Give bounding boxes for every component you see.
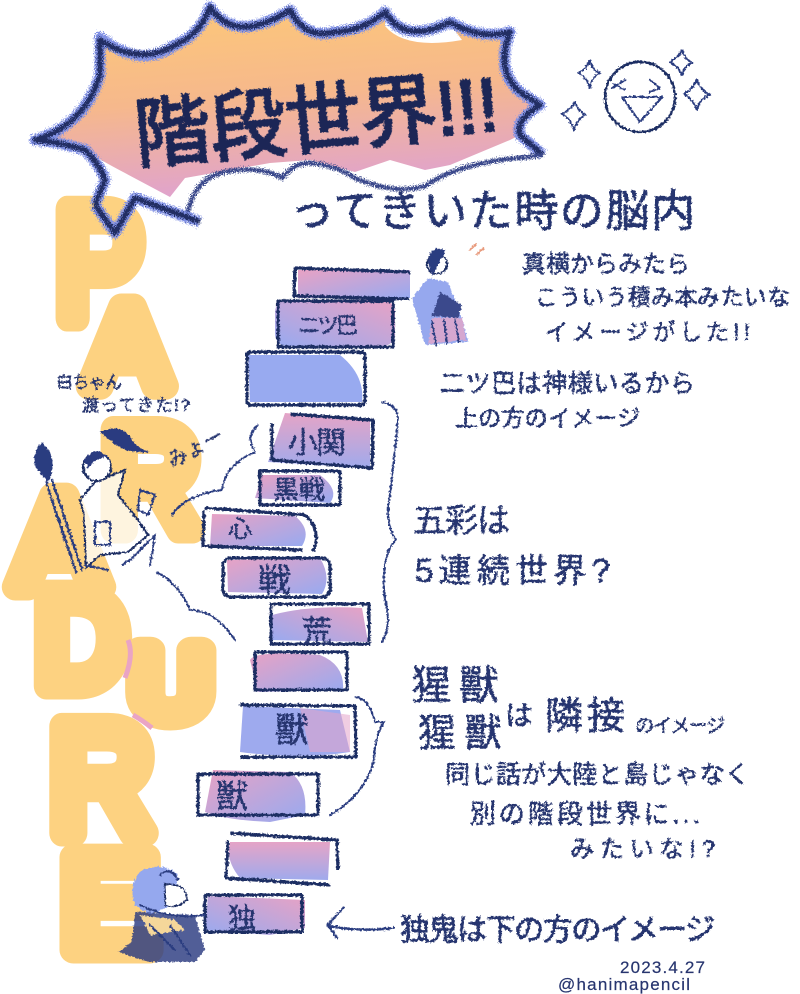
book 4: 小関 bbox=[268, 413, 373, 468]
book 1 bbox=[294, 268, 410, 299]
credit: @hanimapencil bbox=[558, 975, 690, 994]
note: 五彩: 5連続世界? bbox=[415, 552, 610, 589]
book 3 bbox=[247, 352, 365, 405]
background letters: PARADURE bbox=[15, 175, 210, 979]
book 8: 荒: 荒 bbox=[302, 616, 332, 649]
note: ニツ巴: 二ツ巴は神様いるから bbox=[440, 370, 695, 398]
note: side view: 真横からみたら bbox=[522, 251, 690, 278]
book 10: 獸 bbox=[240, 705, 356, 757]
figure: sitting character bottom bbox=[118, 867, 205, 962]
curly line: lower bbox=[157, 572, 235, 640]
book 7: 戦 bbox=[223, 558, 330, 599]
note: 五彩 bbox=[413, 502, 610, 589]
book 5: 戦 bbox=[255, 471, 340, 505]
brace: adjacent worlds bbox=[330, 697, 384, 815]
note: adjacent worlds: は bbox=[505, 700, 533, 731]
note: adjacent worlds: 同じ話が大陸と島じゃなく bbox=[445, 761, 750, 789]
book 2: ニツ巴: ニツ巴 bbox=[298, 313, 358, 338]
book 4: 小関: 小関 bbox=[288, 427, 346, 460]
book 7: 戦: 戦 bbox=[258, 562, 291, 599]
background letters: PARADURE: A bbox=[15, 468, 103, 615]
note: adjacent worlds: 猩獸 bbox=[411, 664, 499, 708]
book stack bbox=[198, 268, 410, 935]
sound effect text: みょー bbox=[164, 425, 227, 472]
background letters: PARADURE: D bbox=[36, 565, 126, 715]
note: adjacent worlds: 猩獸 bbox=[418, 713, 502, 755]
note: ニツ巴: 上の方のイメージ bbox=[455, 405, 640, 431]
icon: sparkles bbox=[562, 50, 710, 130]
background letters: PARADURE: U bbox=[132, 629, 210, 737]
note: ニツ巴 bbox=[440, 370, 695, 431]
background letters: PARADURE: E bbox=[62, 828, 156, 979]
curly line: upper bbox=[172, 425, 258, 515]
book 11: 獣 bbox=[198, 770, 318, 822]
note: side view: こういう積み本みたいな bbox=[535, 284, 790, 310]
book 6: 心: 心 bbox=[228, 516, 252, 543]
speech: 白ちゃん渡ってきた: 渡ってきた!? bbox=[82, 396, 190, 415]
subtitle: ってきいた時の脳内 bbox=[290, 187, 695, 236]
book 12 bbox=[226, 833, 338, 885]
icon: laughing face bbox=[605, 62, 675, 132]
book 8: 荒 bbox=[271, 604, 369, 649]
brace: five-colour group bbox=[382, 402, 398, 642]
background letters: PARADURE: A bbox=[89, 283, 166, 411]
note: side view bbox=[522, 251, 790, 345]
note: adjacent worlds bbox=[411, 664, 750, 863]
note: adjacent worlds: みたいな!? bbox=[570, 836, 715, 863]
figure: girl with paintbrush bbox=[34, 428, 155, 572]
book 9 bbox=[250, 652, 347, 692]
book 10: 獸: 獸 bbox=[275, 712, 309, 750]
note: 独鬼: 独鬼は下の方のイメージ bbox=[400, 914, 715, 947]
letter overlap accents bbox=[125, 640, 152, 728]
speech: 白ちゃん渡ってきた bbox=[56, 373, 190, 415]
arrow to 独 book bbox=[328, 908, 394, 938]
book 5: 戦: 黒戦 bbox=[273, 475, 325, 505]
note: side view: イメージがした!! bbox=[545, 319, 750, 345]
book 6: 心 bbox=[203, 508, 316, 552]
note: 五彩: 五彩は bbox=[413, 502, 510, 539]
date: 2023.4.27 bbox=[620, 958, 705, 977]
background letters: PARADURE: R bbox=[102, 398, 199, 561]
book 2: ニツ巴 bbox=[275, 300, 395, 347]
book 13: 独 bbox=[205, 895, 305, 935]
title text: 階段世界!!! bbox=[131, 62, 502, 179]
speech: 白ちゃん渡ってきた: 白ちゃん bbox=[56, 373, 122, 392]
background letters: PARADURE: R bbox=[50, 692, 153, 866]
icon: paintbrush bbox=[34, 442, 82, 572]
background letters: PARADURE: P bbox=[56, 175, 142, 352]
book 13: 独: 独 bbox=[228, 903, 256, 934]
note: adjacent worlds: 別の階段世界に... bbox=[470, 799, 700, 829]
title burst bbox=[35, 7, 543, 233]
note: adjacent worlds: 隣接 bbox=[545, 696, 625, 738]
note: adjacent worlds: のイメージ bbox=[635, 716, 725, 737]
figure: character top right bbox=[412, 244, 484, 345]
book 11: 獣: 獣 bbox=[216, 778, 248, 814]
